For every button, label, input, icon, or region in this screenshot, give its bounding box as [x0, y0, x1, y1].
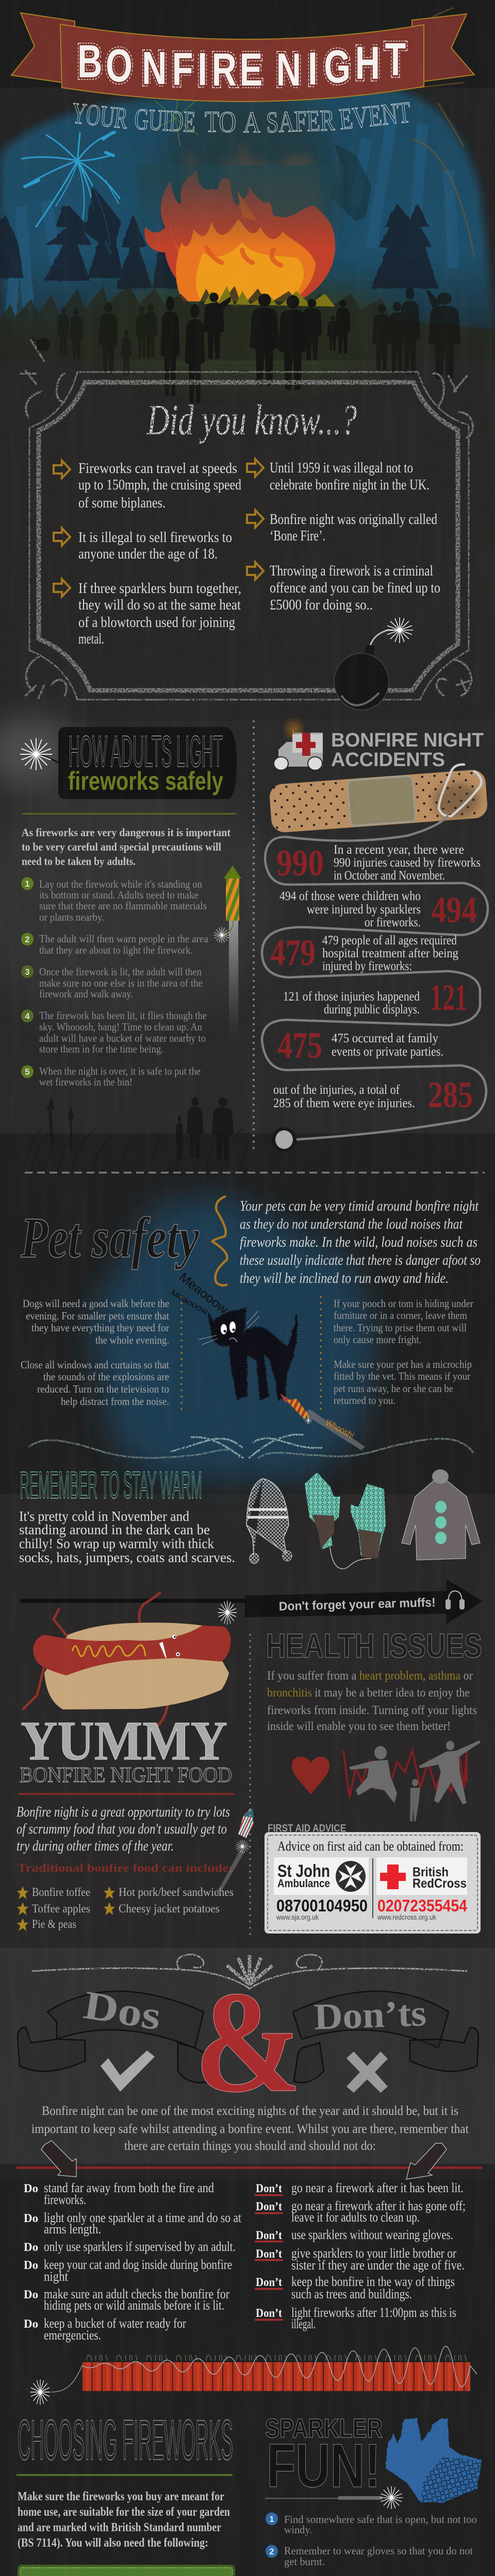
heading tab: how adults light fireworks safely: fireworks safely [68, 767, 223, 795]
badge digits: 2 [269, 2547, 274, 2556]
stat 121: 121 [430, 977, 467, 1018]
list: don'ts [255, 2180, 466, 2331]
text: dos and don'ts intro: important to keep safe whilst attending a bonfire event. Whilst you are there, remember that [31, 2122, 469, 2136]
list: dos: Do [24, 2241, 38, 2253]
illustration: silhouettes and grass [23, 1096, 253, 1172]
heading: sparkler fun [265, 2414, 383, 2500]
heading: dos: Dos [81, 1982, 164, 2039]
text: pet tips right: only cause more fright. [334, 1333, 421, 1346]
text: health: inside will enable you to see them better! [267, 1720, 451, 1733]
heading text: BONFIRE NIGHT [331, 730, 484, 751]
list: don'ts: light fireworks after 11:00pm as this is [291, 2305, 456, 2320]
badge digits [269, 2514, 274, 2576]
step text: adult will have a bucket of water nearby to [39, 1032, 206, 1044]
food text: Cheesy jacket potatoes [119, 1902, 220, 1915]
facts: left column: It is illegal to sell fireworks to [78, 530, 232, 546]
blue glow behind cat [88, 1195, 376, 1479]
stat 121: 121 of those injuries happened [283, 990, 420, 1004]
text: pet intro: they will be inclined to run away and hide. [240, 1270, 449, 1286]
icon: blue glove [385, 2417, 482, 2502]
subtitle: EVENT [338, 95, 412, 136]
facts: right column: £5000 for doing so.. [270, 597, 373, 613]
divider: red rule [16, 2166, 482, 2169]
text: stay warm [19, 1509, 235, 1565]
heading: did you know: Did you know...? [146, 396, 357, 444]
list: dos: fireworks. [44, 2192, 86, 2207]
list: don'ts: Don’t [256, 2182, 282, 2195]
ribbon: don'ts [293, 1991, 478, 2082]
step text: or plants nearby. [39, 911, 104, 923]
text: pet tips right: Make sure your pet has a microchip [334, 1358, 472, 1370]
icon: spark on tab [20, 738, 58, 770]
badge digits: 1 [269, 2514, 274, 2524]
illustration: hot dog [23, 1592, 231, 1726]
step text: make sure no one else is in the area of the [39, 977, 203, 989]
text: HOW ADULTS LIGHT [69, 727, 223, 776]
icon: coat [402, 1469, 480, 1560]
arrow: ear muffs callout: Don't forget your ear muffs! [278, 1596, 436, 1614]
text: pet tips right: returned to you. [334, 1394, 395, 1406]
badge digits: 5 [25, 1067, 30, 1077]
illustration: stethoscope tube [262, 765, 488, 1140]
panel: first aid card [265, 1832, 481, 1934]
stat 494: were injured by sparklers [307, 903, 421, 917]
illustration: dancing people [349, 1740, 481, 1821]
stat 285: out of the injuries, a total of [273, 1083, 400, 1097]
phone numbers [276, 1896, 467, 1915]
text: pet tips right: pet runs away, he or she can be [334, 1382, 453, 1395]
illustration: scared cat [199, 1309, 297, 1399]
text: choosing intro [18, 2490, 230, 2550]
facts: left column: metal. [78, 631, 104, 647]
list: dos: Do [24, 2212, 38, 2225]
heading: sparkler fun: FUN! [267, 2431, 381, 2500]
text: stay warm: socks, hats, jumpers, coats and scarves. [19, 1550, 235, 1565]
stat 285 [273, 1074, 473, 1115]
text: dos and don'ts intro [31, 2104, 469, 2153]
list: don'ts: such as trees and buildings. [291, 2286, 412, 2301]
text: dos and don'ts intro: there are certain things you should and should not do: [124, 2139, 376, 2153]
step text: The firework has been lit, it flies though the [39, 1009, 207, 1022]
stat 479: injured by fireworks: [322, 959, 412, 973]
divider: dashed rule [25, 1172, 485, 1174]
facts: left column: of a blowtorch used for joining [78, 615, 235, 631]
step text: wet fireworks in the bin! [39, 1076, 133, 1088]
icon: sparkler [265, 2486, 403, 2509]
step text: When the night is over, it is safe to put the [39, 1065, 201, 1077]
subtitle: YOUR [71, 96, 129, 135]
icon: ampersand: & [194, 1961, 302, 2122]
icon: mittens [305, 1472, 386, 1569]
brace: orange squiggle [212, 1196, 227, 1285]
heading: bonfire night accidents [274, 721, 484, 771]
stat 475: 475 occurred at family [332, 1031, 438, 1045]
list: don'ts: Don’t [256, 2247, 282, 2260]
text: pet tips left: reduced. Turn on the television to [37, 1383, 169, 1395]
intro text: fireworks [22, 826, 231, 868]
panel: did you know frame [21, 340, 473, 700]
list: dos: night [44, 2269, 69, 2284]
list: food items [17, 1886, 234, 1931]
food text: Bonfire toffee [32, 1886, 90, 1899]
step text: get burnt. [284, 2555, 325, 2568]
heading tab: how adults light fireworks safely [58, 727, 237, 799]
subtitle: SAFER [266, 103, 336, 139]
text: stay warm: chilly! So wrap up warmly with thick [19, 1536, 214, 1551]
facts: left column: they will do so at the same heat [78, 597, 241, 613]
facts: left column: If three sparklers burn together, [78, 581, 241, 597]
subtitle: TO [205, 105, 236, 139]
text: food intro: of scrummy food that you don't usually get to [16, 1821, 227, 1837]
banner right tail [412, 14, 474, 81]
intro text: fireworks: As fireworks are very dangerous it is important [22, 826, 231, 839]
icon: stethoscope chest piece [272, 1127, 296, 1152]
stat 121 [283, 977, 467, 1018]
icon: ambulance [274, 721, 323, 770]
text: health: If you suffer from a heart problem, asthma or [267, 1669, 473, 1683]
icon: ear muffs [446, 1591, 465, 1609]
logo: st john ambulance: St John [277, 1861, 330, 1881]
list: dos: only use sparklers if supervised by an adult. [44, 2239, 236, 2254]
list: dos [24, 2180, 242, 2343]
step text: Lay out the firework while it's standing on [39, 878, 202, 890]
text: cat meaow: Meaooow [176, 1270, 231, 1317]
illustration: small rocket with trail: Whoosh! [324, 1417, 356, 1441]
text: food intro: Bonfire night is a great opportunity to try lots [16, 1804, 230, 1820]
text: pet tips right [334, 1297, 473, 1406]
step text [39, 878, 209, 1088]
text: pet tips right: furniture or in a corner, leave them [334, 1309, 467, 1321]
facts: left column: Fireworks can travel at speeds [78, 461, 237, 477]
step text: Find somewhere safe that is open, but not too [284, 2513, 477, 2526]
ground and grass [0, 283, 495, 361]
dividers: orange dotted lines [182, 1297, 321, 1409]
panel: night sky with blue paint [0, 82, 495, 376]
icon: woolly hat [246, 1479, 292, 1564]
divider: green rule [22, 813, 236, 815]
badge digits [25, 879, 30, 1077]
text: pet tips left: they have everything they need for [31, 1321, 169, 1334]
step text: The adult will then warn people in the area [39, 933, 209, 945]
stat 479: hospital treatment after being [322, 946, 458, 960]
text: stay warm: standing around in the dark can be [19, 1522, 210, 1537]
list: don'ts: keep the bonfire in the way of things [291, 2274, 455, 2289]
heading text: ACCIDENTS [331, 749, 445, 771]
text: pet tips right: If your pooch or tom is hiding under [334, 1297, 473, 1310]
list: don'ts: Don’t [256, 2307, 282, 2319]
panel: first aid card: Advice on first aid can be obtained from: [277, 1839, 464, 1854]
food text: Toffee apples [32, 1902, 90, 1915]
text: pet tips left: the whole evening. [95, 1334, 169, 1346]
food text [32, 1886, 234, 1930]
illustration: rocket with smoke trail [213, 866, 241, 1044]
text: pet intro [240, 1198, 481, 1286]
text: health: bronchitis it may be a better idea to enjoy the [267, 1686, 470, 1700]
text: pet tips left: Close all windows and curtains so that [21, 1359, 169, 1371]
illustration: striped rocket [217, 1808, 254, 1896]
facts: left column: of some biplanes. [78, 495, 166, 511]
list: dos: light only one sparkler at a time and do so at [44, 2210, 242, 2225]
heading text [331, 730, 484, 771]
facts: right column: Until 1959 it was illegal not to [270, 460, 413, 476]
trees [0, 144, 438, 289]
phone numbers: 02072355454 [377, 1896, 467, 1915]
list: dos: emergencies. [44, 2328, 101, 2343]
stat 494: or fireworks. [365, 916, 421, 929]
arrow: left pointer [41, 2141, 76, 2177]
stat 990: in October and November. [334, 869, 445, 883]
stat 475 [277, 1025, 443, 1066]
text: choosing intro: (BS 7114). You will also need the following: [18, 2536, 208, 2550]
stat 475: 475 [277, 1025, 322, 1066]
text: choosing intro: and are marked with British Standard number [18, 2521, 221, 2534]
divider: green rule [16, 2474, 233, 2476]
text: dos and don'ts intro: Bonfire night can be one of the most exciting nights of the year and it should be, but it is [42, 2104, 458, 2118]
list: don'ts: Don’t [256, 2276, 282, 2289]
step text [284, 2513, 479, 2576]
web addresses: www.redcross.org.uk [377, 1913, 437, 1921]
banner left tail [11, 13, 75, 82]
list: don'ts: Don’t [256, 2229, 282, 2242]
food text: Pie & peas [32, 1918, 76, 1930]
step text: firework and walk away. [39, 988, 133, 1000]
icon: faint side fireworks [155, 8, 474, 258]
icon: spark by arrow [218, 1601, 237, 1624]
food text: Hot pork/beef sandwiches [119, 1886, 234, 1899]
step text: sure that there are no flammable materials [39, 900, 207, 912]
illustration: dynamite row [30, 2346, 477, 2405]
stat 479: 479 people of all ages required [322, 934, 457, 947]
steps: sparkler fun [266, 2512, 479, 2576]
banner centre [60, 24, 424, 101]
phone numbers: 08700104950 [276, 1896, 368, 1915]
stats: accident numbers [270, 842, 481, 1115]
text: cat meaow: Meaooow [169, 1289, 209, 1317]
logo: st john ambulance [277, 1861, 366, 1892]
intro text: fireworks: need to be taken by adults. [22, 855, 136, 868]
divider: dotted vertical rule [253, 721, 255, 1152]
step text: store them in for the time being. [39, 1043, 163, 1055]
list: dos: stand far away from both the fire and [44, 2180, 214, 2195]
text: pet tips right: fitted by the vet. This means if your [334, 1370, 470, 1382]
text: health: fireworks from inside. Turning off your lights [267, 1704, 477, 1717]
stat 285: 285 [428, 1074, 473, 1115]
icons: gold arrows [54, 459, 263, 597]
text: stay warm: It's pretty cold in November and [19, 1509, 189, 1524]
step text: its bottom or stand. Adults need to make [39, 889, 199, 901]
facts: right column [270, 460, 440, 613]
number badges [266, 2512, 278, 2576]
heading: bonfire night food: BONFIRE NIGHT FOOD [20, 1764, 232, 1787]
divider: red rule [19, 1793, 234, 1795]
list: dos: Do [24, 2288, 38, 2301]
subtitle: A [243, 106, 260, 139]
icon: cross [346, 2052, 388, 2093]
flourish: chalk swirl divider [28, 1434, 473, 1458]
list: dos: make sure an adult checks the bonfire for [44, 2286, 229, 2301]
stat 494: 494 [431, 889, 477, 930]
stat 285: 285 of them were eye injuries. [273, 1096, 415, 1110]
text: food intro: try during other times of the year. [16, 1838, 174, 1854]
title: BONFIRE NIGHT [77, 33, 406, 95]
heading: pet safety: Pet safety [20, 1206, 200, 1270]
stat 479: 479 [270, 932, 316, 973]
facts: left column: anyone under the age of 18. [78, 546, 218, 562]
list: dos: Do [24, 2259, 38, 2272]
list: dos: hiding pets or wild animals before it is lit. [44, 2298, 224, 2313]
icons: stars [17, 1886, 115, 1931]
text: pet tips left: the sounds of the explosions are [43, 1370, 169, 1383]
web addresses [276, 1913, 437, 1921]
ribbon: dos [18, 1991, 211, 2082]
step text: that they are about to light the firework. [39, 944, 193, 956]
facts: right column: celebrate bonfire night in the UK. [270, 477, 430, 493]
logo: british red cross [380, 1865, 467, 1891]
text: pet tips left: Dogs will need a good walk before the [23, 1297, 169, 1310]
subtitle: GUIDE [134, 102, 196, 139]
list: don'ts: give sparklers to your little brother or [291, 2246, 456, 2261]
intro text: fireworks: to be very careful and special precautions will [22, 840, 221, 853]
step text: Once the firework is lit, the adult will then [39, 965, 202, 978]
illustration: small rocket with trail [280, 1394, 365, 1450]
list: don'ts: use sparklers without wearing gloves. [291, 2227, 453, 2242]
cat eyes [221, 1324, 227, 1334]
stat 990: 990 [276, 842, 324, 884]
list: dos: Do [24, 2317, 38, 2330]
list: don'ts: go near a firework after it has been lit. [291, 2180, 464, 2195]
facts: right column: ‘Bone Fire’. [270, 528, 325, 544]
icon: heart [292, 1757, 329, 1794]
number badges [21, 877, 34, 1078]
stat 990: In a recent year, there were [334, 843, 464, 857]
web addresses: www.sja.org.uk [276, 1913, 319, 1921]
text: choosing intro: home use, are suitable for the size of your garden [18, 2505, 230, 2519]
badge digits: 4 [25, 1011, 30, 1021]
list: dos: arms length. [44, 2222, 101, 2236]
icon: tick [101, 2050, 155, 2092]
list: dos: Do [24, 2182, 38, 2195]
divider: dotted vertical rule [249, 1635, 251, 1938]
icon: blue firework burst [22, 132, 120, 252]
facts: right column: Throwing a firework is a criminal [270, 563, 433, 579]
arrow: ear muffs callout [21, 1579, 483, 1624]
badge digits: 2 [25, 935, 30, 944]
step text: Remember to wear gloves so that you do not [284, 2545, 473, 2557]
list: dos: keep your cat and dog inside during bonfire [44, 2257, 232, 2272]
subheading: traditional food: Traditional bonfire food can include: [18, 1861, 233, 1874]
illustration: sticking plaster [269, 769, 488, 833]
stat 990 [276, 842, 481, 884]
heading: yummy: YUMMY [21, 1710, 227, 1772]
badge digits: 1 [25, 879, 30, 889]
icon: bomb [334, 617, 413, 710]
text: pet tips right: there. Trying to prise them out will [334, 1321, 467, 1334]
arrow: right pointer [406, 2143, 447, 2179]
panel: equipment checklist [18, 2565, 235, 2576]
illustration: bonfire flames [137, 139, 343, 301]
title: BONFIRE NIGHT [77, 33, 406, 95]
stat 121: during public displays. [324, 1003, 420, 1016]
badge digits: 3 [25, 967, 30, 977]
logo: st john ambulance: Ambulance [277, 1877, 330, 1890]
text: choosing intro: Make sure the fireworks you buy are meant for [18, 2490, 224, 2503]
list: don'ts: illegal. [291, 2316, 316, 2331]
stat 479 [270, 932, 458, 973]
step text: sky. Whooosh, bang! Time to clean up. An [39, 1021, 202, 1033]
facts: left column [78, 461, 241, 647]
list: don'ts: sister if they are under the age of five. [291, 2258, 465, 2273]
stat 494: 494 of those were children who [279, 889, 421, 903]
facts: right column: Bonfire night was originally called [270, 512, 437, 528]
list: dos: keep a bucket of water ready for [44, 2316, 186, 2331]
text: pet tips left: help distract from the noise. [61, 1395, 169, 1408]
heading: first aid advice: FIRST AID ADVICE [268, 1823, 346, 1834]
facts: left column: up to 150mph, the cruising speed [78, 477, 241, 493]
stat 494 [279, 889, 477, 930]
illustration: heartbeat line [343, 1750, 467, 1798]
text: health [267, 1669, 477, 1733]
subtitle [71, 95, 412, 139]
step text: windy. [284, 2523, 312, 2536]
heading: sparkler fun: SPARKLER [265, 2414, 383, 2444]
heading: don'ts: Don’ts [314, 1992, 427, 2038]
stat 475: events or private parties. [332, 1045, 443, 1059]
title: BONFIRE NIGHT [77, 33, 406, 95]
flourish: chalk scroll divider [31, 1955, 467, 1989]
logo: british red cross: British [412, 1865, 449, 1879]
text: pet tips left [21, 1297, 169, 1408]
text: food intro [16, 1804, 230, 1854]
list: don'ts: Don’t [256, 2200, 282, 2213]
facts: right column: offence and you can be fined up to [270, 580, 440, 596]
banner [11, 13, 474, 101]
steps: lighting fireworks [21, 877, 209, 1088]
logo: british red cross: RedCross [412, 1876, 467, 1891]
list: don'ts: leave it for adults to clean up. [291, 2210, 420, 2225]
text: pet tips left: evening. For smaller pets ensure that [26, 1310, 169, 1322]
illustration: crowd silhouettes [31, 287, 461, 404]
